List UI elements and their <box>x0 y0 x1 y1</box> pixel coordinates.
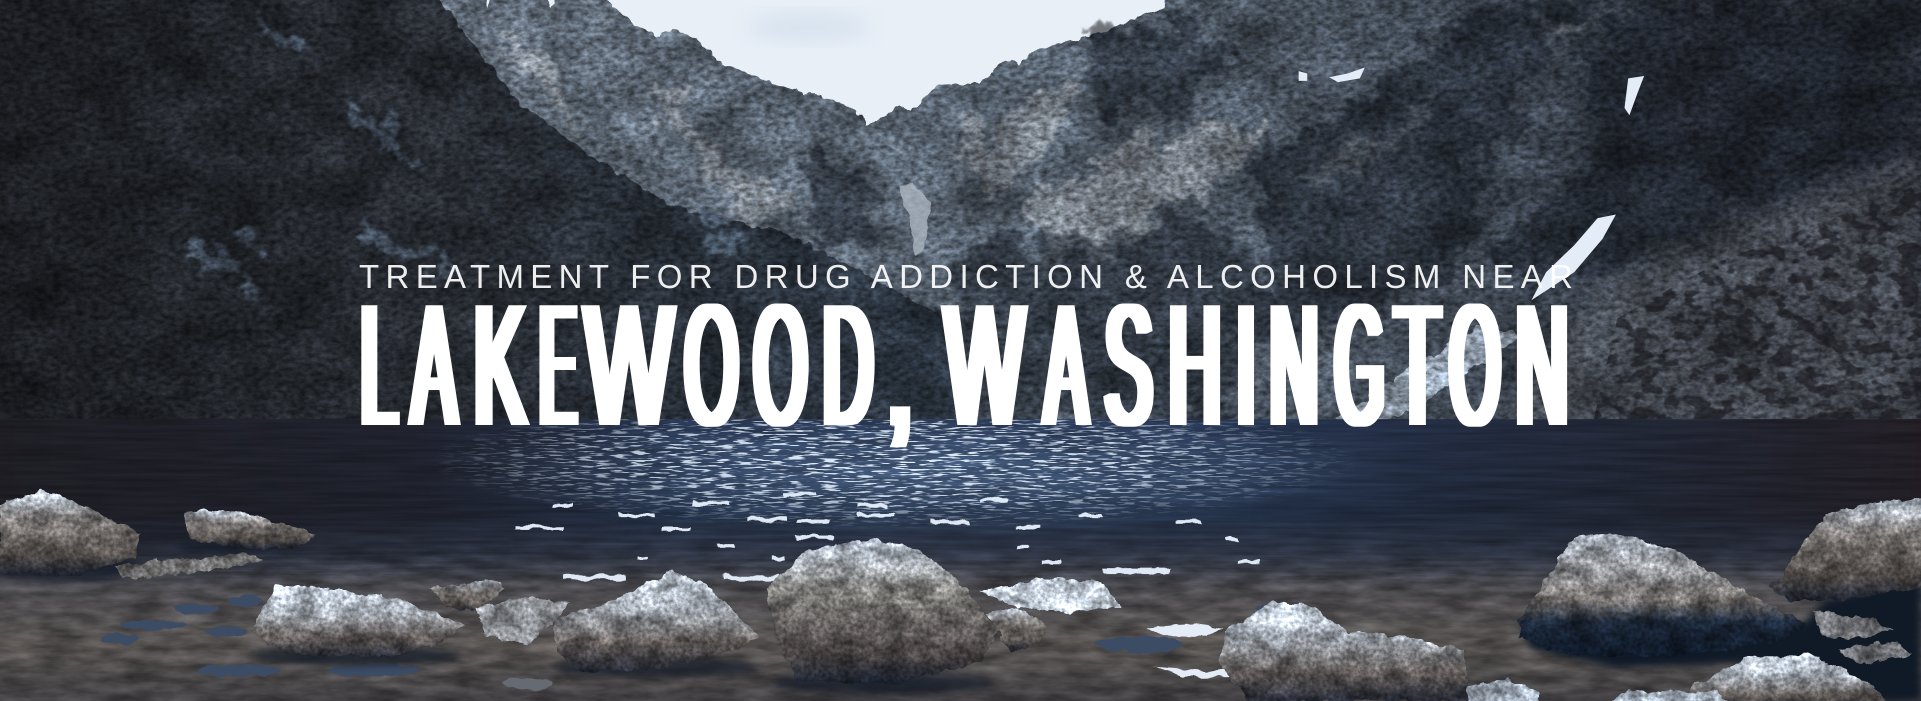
main title: E <box>540 267 576 462</box>
boulders <box>0 490 1921 701</box>
lower right slope <box>1501 159 1921 424</box>
subtitle: TREATMENT FOR DRUG ADDICTION & ALCOHOLISM NEAR <box>359 258 1573 295</box>
snow patches <box>1299 67 1644 300</box>
main title: K <box>474 267 526 462</box>
shore stones <box>100 596 1294 690</box>
main title: H <box>1169 267 1221 462</box>
main title: A <box>412 267 456 462</box>
main title: S <box>1105 267 1152 462</box>
main title: L <box>361 267 397 462</box>
dark forested left slope <box>0 0 968 453</box>
waterfall <box>898 184 931 255</box>
sky <box>0 0 1921 159</box>
lake water <box>0 408 1921 701</box>
foam patches <box>1145 624 1240 678</box>
headline text: N <box>1516 267 1568 462</box>
main title: D <box>823 267 873 462</box>
main title: , <box>885 267 915 462</box>
main title: T <box>1395 267 1440 462</box>
larger glints nearer the shore <box>515 493 1259 580</box>
main title: W <box>585 267 673 462</box>
main title: W <box>945 267 1024 462</box>
shallow lake bed texture <box>0 539 1921 701</box>
main title: O <box>754 267 807 462</box>
main title: G <box>1335 267 1384 462</box>
rock face highlights <box>496 12 1593 263</box>
dark patches on lower right slope <box>1594 188 1921 420</box>
darkened upper right face <box>1578 0 1921 226</box>
main title: A <box>1045 267 1087 462</box>
pale scree on the slope <box>178 12 760 282</box>
dark shadow beneath right-hand boulders <box>1519 576 1921 701</box>
sun glitter on water <box>440 419 1348 528</box>
far mountain range <box>440 0 1921 420</box>
main title: O <box>1450 267 1500 462</box>
main title: O <box>685 267 738 462</box>
main title: N <box>1270 267 1318 462</box>
pale scree behind the title <box>1335 321 1519 423</box>
dark rock bands <box>784 0 1921 424</box>
boulder shadows <box>0 540 992 695</box>
main title: I <box>1237 267 1255 462</box>
